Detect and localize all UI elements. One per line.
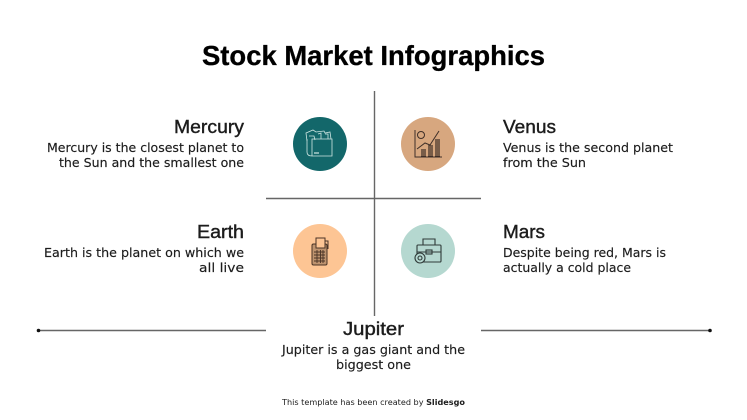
description: Mercury	[47, 140, 244, 170]
panel: Mars	[503, 222, 666, 275]
panel: Jupiter	[281, 319, 465, 372]
panel: Mercury	[47, 117, 244, 170]
description: Mercury: the Sun and the smallest one	[59, 155, 244, 170]
description: Mars: actually a cold place	[503, 260, 631, 275]
heading: Venus: Venus	[503, 117, 556, 137]
icon: briefcase with coin	[401, 224, 455, 278]
icon: growth chart with coins	[401, 117, 455, 171]
description: Mars: Despite being red, Mars is	[503, 245, 666, 260]
footer credit: This template has been created by Slidesgo	[281, 398, 466, 407]
heading: Mars: Mars	[503, 222, 545, 242]
description: Jupiter: biggest one	[336, 357, 411, 372]
panel: Earth	[44, 222, 244, 275]
heading: Mercury: Mercury	[174, 117, 244, 137]
icon: wallet with banknotes	[293, 117, 347, 171]
vertical axis line	[374, 91, 376, 316]
description: Mercury: Mercury is the closest planet to	[47, 140, 244, 155]
heading: Earth: Earth	[197, 222, 244, 242]
description: Earth: Earth is the planet on which we	[44, 245, 244, 260]
description: Jupiter: Jupiter is a gas giant and the	[281, 342, 465, 357]
description: Earth	[44, 245, 244, 275]
left timeline line with dot	[37, 329, 266, 332]
icon: calculator with receipt	[293, 224, 347, 278]
description: Venus: Venus is the second planet	[503, 140, 673, 155]
right timeline line with dot	[481, 329, 712, 332]
description: Venus: from the Sun	[503, 155, 586, 170]
panel: Venus	[503, 117, 673, 170]
description: Venus	[503, 140, 673, 170]
title: Stock Market Infographics	[202, 40, 545, 71]
heading: Jupiter: Jupiter	[343, 319, 404, 339]
description: Jupiter	[281, 342, 465, 372]
description: Mars	[503, 245, 666, 275]
description: Earth: all live	[199, 260, 244, 275]
horizontal axis line	[266, 198, 481, 200]
